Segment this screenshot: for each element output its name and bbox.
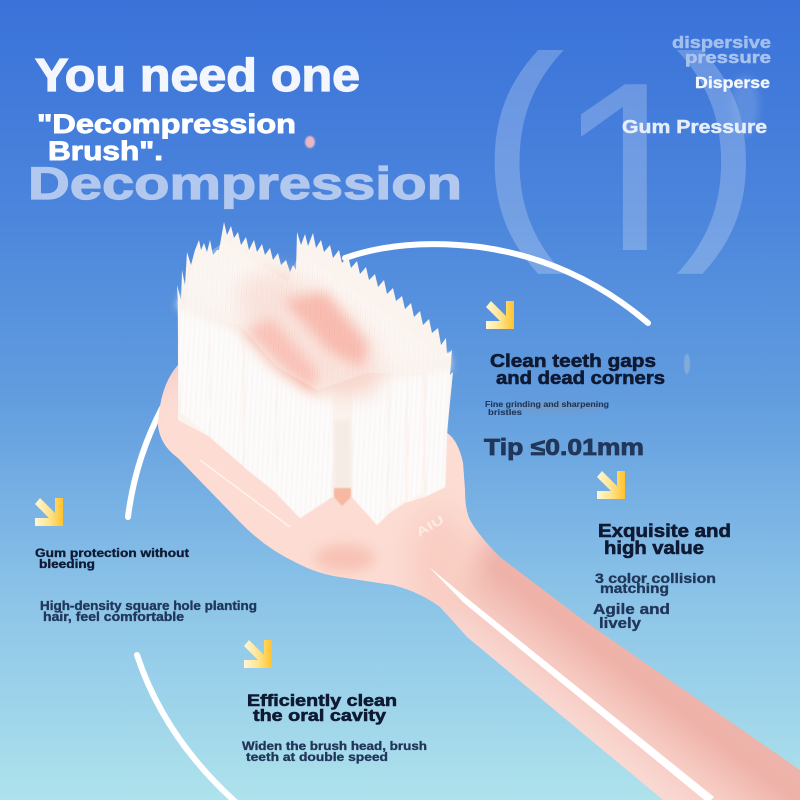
- title: [35, 49, 360, 166]
- feature: exquisite and high value: high value: [604, 538, 704, 558]
- feature: efficiently clean: Widen the brush head, brush: [242, 739, 427, 753]
- feature: gum protection: bleeding: [39, 557, 95, 571]
- feature: clean teeth gaps: bristles: [488, 408, 523, 417]
- feature: exquisite and high value: [593, 521, 731, 632]
- arrow: exquisite and high value: [597, 471, 625, 499]
- feature: clean teeth gaps: [484, 351, 665, 460]
- large decorative numeral (1): ): [680, 10, 759, 274]
- decorative arc: lower left: [137, 655, 240, 800]
- feature: gum protection: [35, 546, 257, 624]
- feature: efficiently clean: [242, 691, 427, 764]
- bristle silhouette: [177, 222, 453, 525]
- large decorative numeral (1): 1: [555, 27, 705, 328]
- arrow: clean teeth gaps: [486, 301, 514, 329]
- feature: gum protection: High-density square hole planting: [40, 599, 257, 613]
- feature: clean teeth gaps: Fine grinding and sharpening: [485, 400, 609, 409]
- image noise smudges: [305, 75, 759, 413]
- arrow: efficiently clean: [244, 640, 272, 668]
- pink bristle core: [217, 250, 403, 420]
- title: You need one: [35, 49, 360, 101]
- fine bristle streaks on top face: [184, 242, 445, 390]
- feature: exquisite and high value: 3 color collision: [595, 570, 716, 586]
- large decorative numeral (1): (: [482, 10, 561, 274]
- top-right text block: [622, 33, 771, 137]
- feature: gum protection: Gum protection without: [35, 546, 189, 560]
- peach base gap: [334, 488, 351, 506]
- top-right text block: Disperse: [695, 75, 770, 92]
- gap shading between tufts: [334, 420, 351, 495]
- feature: clean teeth gaps: and dead corners: [496, 368, 665, 388]
- feature: efficiently clean: Efficiently clean: [247, 691, 397, 710]
- top-right text block: pressure: [685, 48, 771, 67]
- feature: gum protection: hair, feel comfortable: [43, 610, 184, 624]
- front bristle tufts: [178, 300, 450, 525]
- feature: clean teeth gaps: Clean teeth gaps: [490, 351, 656, 371]
- engraved mark: AIU: [414, 512, 446, 540]
- feature: exquisite and high value: lively: [599, 615, 642, 632]
- bristle block: [177, 222, 453, 525]
- large decorative numeral (1): [494, 50, 746, 274]
- arrow: gum protection: [35, 498, 63, 526]
- title: Brush".: [48, 136, 163, 166]
- top-right text block: Gum Pressure: [622, 117, 767, 137]
- feature: clean teeth gaps: Tip ≤0.01mm: [484, 434, 644, 460]
- decorative arc: left: [128, 408, 162, 517]
- feature: exquisite and high value: Exquisite and: [598, 521, 731, 541]
- soft ridge between top and front faces: [180, 300, 450, 390]
- feature: efficiently clean: the oral cavity: [253, 706, 387, 725]
- white handle highlight: [429, 567, 714, 800]
- feature: exquisite and high value: matching: [600, 580, 669, 596]
- pale heading: Decompression: Decompression: [28, 158, 462, 209]
- brush head and handle: [158, 365, 800, 800]
- toothbrush: [130, 222, 800, 800]
- top-right text block: dispersive: [672, 33, 771, 52]
- feature: exquisite and high value: Agile and: [593, 601, 670, 618]
- title: "Decompression: [37, 109, 296, 139]
- decorative arc: upper right: [345, 244, 648, 323]
- feature: efficiently clean: teeth at double speed: [246, 750, 388, 764]
